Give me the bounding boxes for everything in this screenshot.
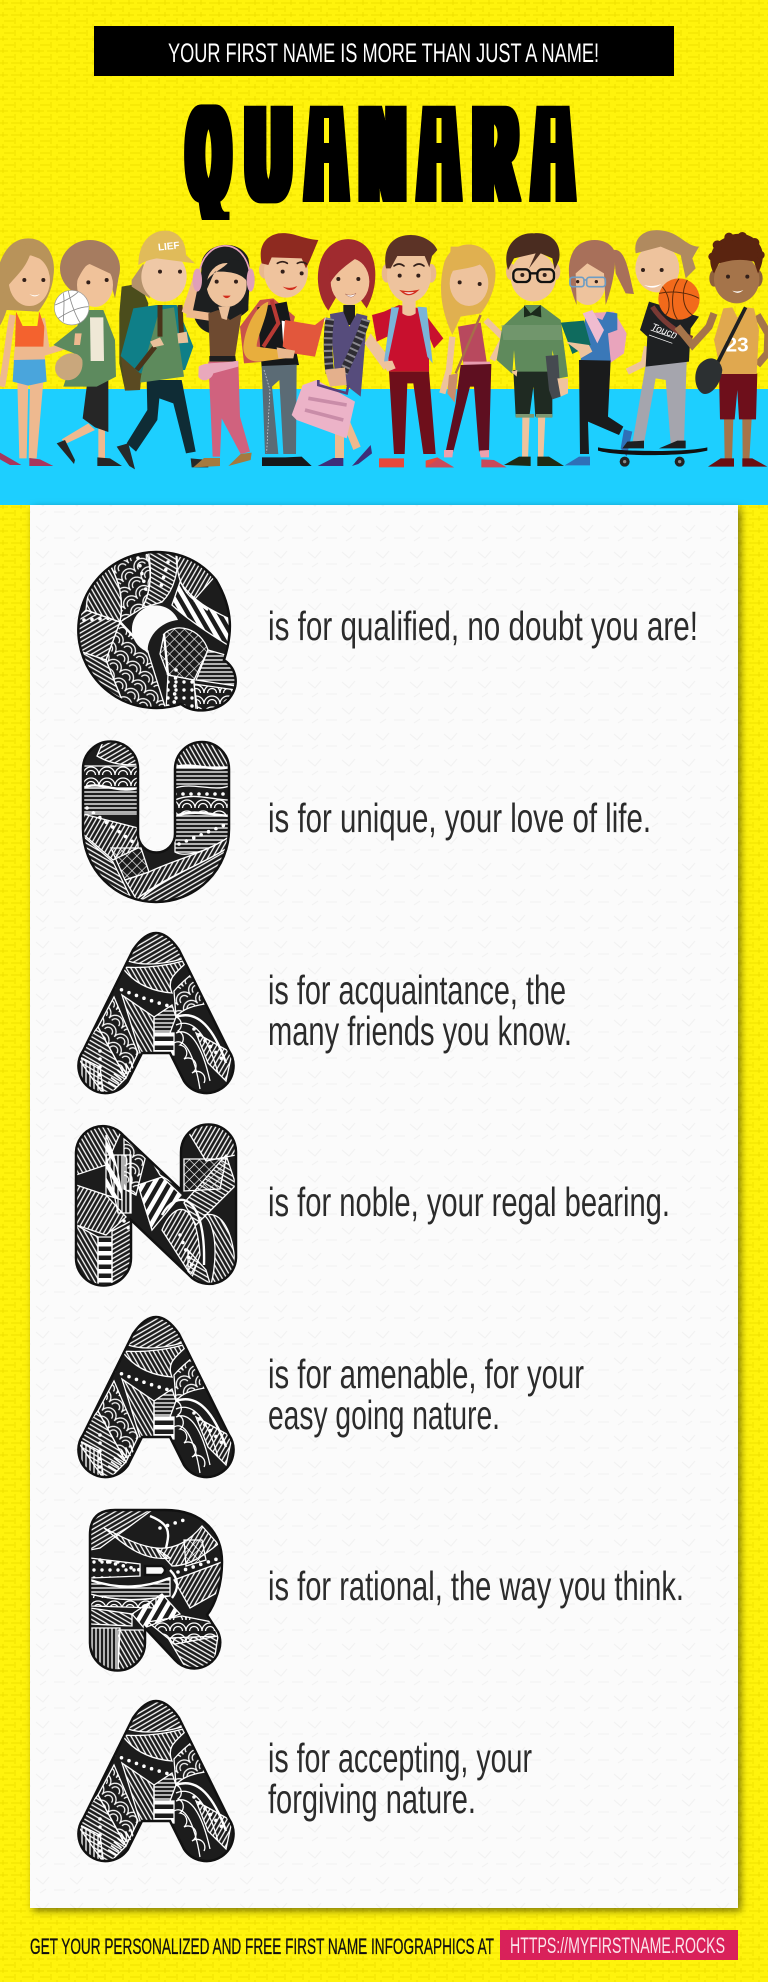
title: QUANARA: [189, 77, 564, 231]
person: girl in purple vest with pink bag: [292, 239, 375, 466]
text: A lines: is for amenable, for your: [268, 1351, 584, 1397]
person: girl in orange top: [0, 238, 78, 466]
text: A lines: is for accepting, your: [268, 1735, 532, 1781]
title: QUANARA: A: [428, 77, 450, 230]
text: A lines: forgiving nature.: [268, 1776, 476, 1822]
icon: patterned letter U: [83, 742, 229, 917]
illustration: group of twelve students, right six: [365, 230, 768, 467]
person: boy on skateboard with basketball: Touch: [650, 322, 679, 341]
row: A is for acquaintance: [76, 928, 572, 1098]
text: A lines: many friends you know.: [268, 1008, 572, 1054]
row: Q is for qualified: [76, 549, 698, 712]
text: A lines: [268, 1735, 532, 1822]
icon: patterned letter A: [76, 1696, 234, 1866]
panel: white card with letter rows: [30, 505, 738, 1908]
icon: patterned letter A: [76, 928, 234, 1098]
person: curly hair boy with yellow tank and black bag: [677, 232, 768, 467]
person: curly hair boy with yellow tank and black bag: 23: [726, 334, 749, 357]
person: girl with pink headphones: [182, 245, 255, 466]
cyan floor band: [0, 389, 768, 505]
text: A lines: is for acquaintance, the: [268, 967, 566, 1013]
icon: patterned letter Q: [76, 549, 236, 712]
person: boy with cap and hiking backpack: [117, 231, 220, 469]
row: A is for accepting: [76, 1696, 532, 1866]
row: R is for rational: [90, 1510, 684, 1675]
person: boy with cap and hiking backpack: LIEF: [157, 240, 180, 254]
person: girl in green jacket with volleyball: [53, 240, 122, 466]
title: QUANARA: N: [361, 79, 404, 231]
title: QUANARA: U: [247, 79, 290, 231]
person: boy with red backpack and book: [240, 233, 327, 466]
row: U is for unique: [83, 742, 651, 917]
person: boy with glasses in green sweater: [497, 233, 568, 466]
person: boy on skateboard with basketball: [598, 230, 707, 467]
person: blonde girl with pink top: [426, 245, 507, 467]
icon: patterned letter A: [76, 1312, 234, 1482]
person: ponytail girl with pink backpack: [561, 240, 634, 465]
banner: tagline: [94, 26, 674, 76]
icon: patterned letter N: [76, 1125, 236, 1290]
title: QUANARA: A: [316, 77, 337, 230]
row: N is for noble: [76, 1125, 670, 1290]
title: QUANARA: R: [475, 78, 516, 231]
title: QUANARA: Q: [189, 77, 228, 230]
text: A lines: easy going nature.: [268, 1392, 500, 1438]
icon: patterned letter R: [90, 1510, 222, 1675]
illustration: group of twelve students, left six: [0, 231, 375, 469]
text: A lines: [268, 967, 572, 1054]
footer: call to action: GET YOUR PERSONALIZED AND FREE FIRST NAME INFOGRAPHICS AT: [30, 1934, 494, 1959]
title: QUANARA: A: [542, 77, 564, 230]
person: boy in red shirt with blue straps: [365, 235, 454, 467]
text: A lines: [268, 1351, 584, 1438]
row: A is for amenable: [76, 1312, 584, 1482]
